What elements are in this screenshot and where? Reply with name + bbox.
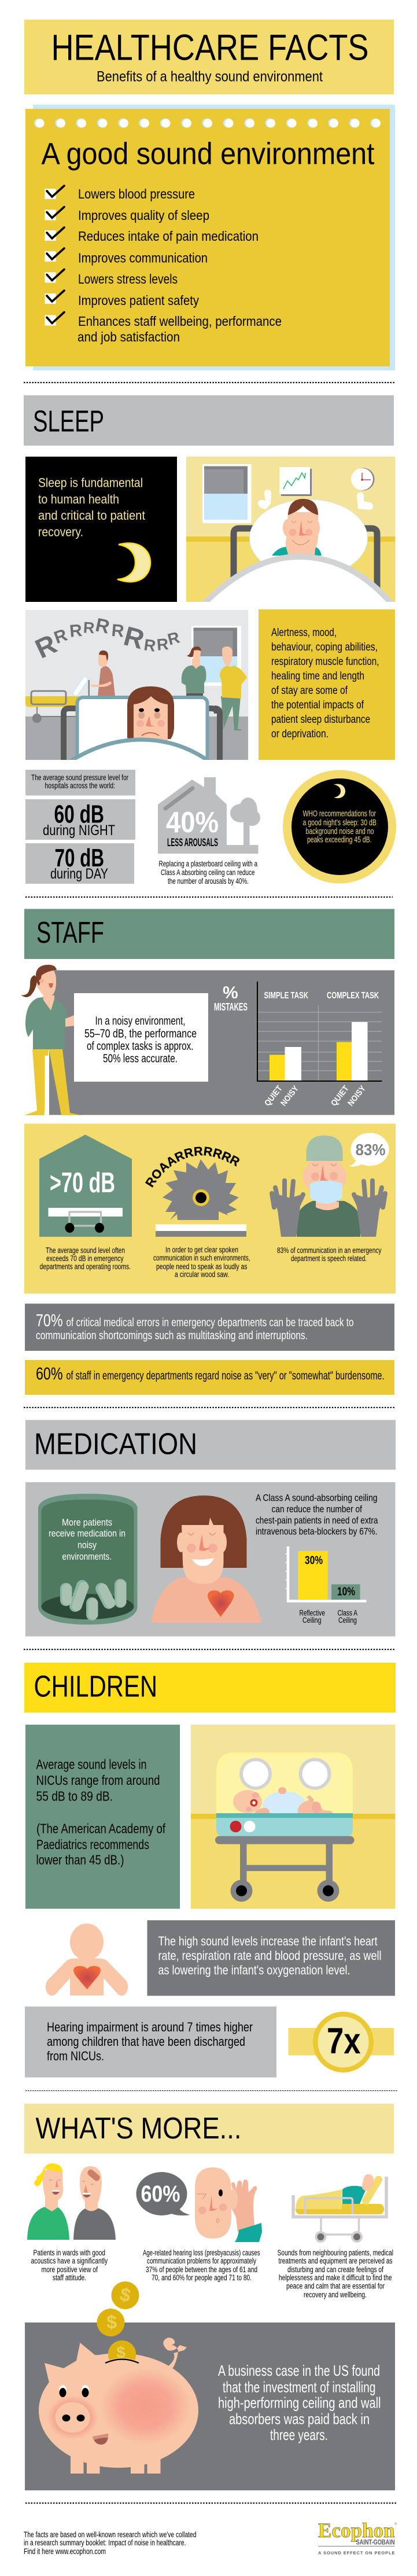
- trolley stand: [215, 1836, 354, 1902]
- snoring letters: R: [94, 613, 112, 638]
- footer note: [24, 2530, 197, 2556]
- text: class A ceiling: can reduce the number of: [272, 1504, 362, 1515]
- icon: green house with trolley: [39, 1134, 132, 1237]
- panel: sleep deprivation effects: or deprivation.: [271, 728, 329, 740]
- caption: exceeds 70 dB in emergency: [46, 1254, 124, 1263]
- illustration: snoring patient ward: [25, 610, 248, 770]
- icon: house with 40% less arousals: LESS AROUSALS: [167, 837, 218, 849]
- checklist: Improves communication: [78, 250, 208, 265]
- panel: NICU sound levels: Average sound levels in: [36, 1757, 147, 1772]
- bar chart: ceilings: [285, 1546, 367, 1625]
- badge: WHO recommendations: peaks exceeding 45 dB.: [307, 836, 371, 845]
- icon: house with 40% less arousals: [158, 777, 260, 885]
- panel: NICU sound levels: [25, 1725, 180, 1909]
- stat boxes: hospital sound levels: hospitals across the world:: [45, 781, 115, 790]
- icon: falling coins: $: [106, 2312, 117, 2332]
- checklist: Improves quality of sleep: [78, 208, 209, 223]
- panel: sleep is fundamental: [25, 457, 177, 602]
- callout: noisy environment: 55–70 dB, the performance: [84, 1028, 197, 1041]
- icon: glove right: [354, 1181, 386, 1237]
- panel: sleep deprivation effects: healing time and length: [271, 670, 364, 682]
- baby: [233, 1787, 333, 1820]
- speech bubble: 60%: [136, 2172, 190, 2215]
- callout: 70% critical medical errors: 70%: [36, 1311, 62, 1330]
- caption: department is speech related.: [291, 1254, 367, 1263]
- stat boxes: hospital sound levels: 60 dB: [54, 800, 104, 829]
- panel: NICU sound levels: lower than 45 dB.): [36, 1852, 124, 1867]
- bar chart: mistakes: QUIET: [263, 1084, 285, 1108]
- icon: house with 40% less arousals: Class A absorbing ceiling can reduce: [161, 868, 254, 877]
- badge: 7x: 7x: [327, 2021, 361, 2061]
- caption: departments and operating rooms.: [39, 1262, 131, 1271]
- panel: NICU sound levels: (The American Academy of: [36, 1821, 165, 1836]
- icon: infant with heart: [46, 1924, 128, 1996]
- logo: Ecophon: [318, 2519, 397, 2556]
- notebook holes: [34, 118, 381, 127]
- bar chart: mistakes: NOISY: [279, 1084, 301, 1108]
- icon: circular saw: ROAARRRRRRR: [145, 1146, 239, 1188]
- caption: communication in such environments,: [153, 1254, 250, 1262]
- illustration: man with hand to ear: [195, 2167, 262, 2242]
- caption: peace and calm that are essential for: [286, 2281, 385, 2291]
- logo: Ecophon: A SOUND EFFECT ON PEOPLE: [318, 2550, 394, 2556]
- panel: NICU sound levels: 55 dB to 89 dB.: [36, 1788, 113, 1803]
- caption: 83% of communication in an emergency: [277, 1246, 382, 1255]
- caption: recovery and wellbeing.: [304, 2291, 367, 2299]
- section heading: staff: STAFF: [36, 916, 104, 950]
- icon: house with 40% less arousals: Replacing a plasterboard ceiling with a: [158, 859, 257, 868]
- snoring letters: R: [165, 629, 182, 649]
- icon: small moon: [334, 784, 345, 798]
- section heading: what's more: [24, 2104, 394, 2154]
- logo: Ecophon: SAINT-GOBAIN: [356, 2538, 394, 2546]
- panel: sleep is fundamental: to human health: [38, 492, 119, 506]
- bar chart: ceilings: 30%: [305, 1555, 323, 1567]
- badge: WHO recommendations: a good night's sleep: 30 dB: [303, 818, 377, 828]
- panel: sleep is fundamental: recovery.: [38, 524, 83, 539]
- caption: communication problems for approximately: [147, 2257, 256, 2265]
- panel: sleep deprivation effects: respiratory muscle function,: [271, 656, 379, 668]
- figure: patient in bed: [61, 686, 223, 760]
- callout: noisy environment: [74, 993, 208, 1082]
- panel: sleep is fundamental: and critical to patient: [38, 508, 145, 523]
- icon: heart: [208, 1590, 234, 1617]
- bar chart: ceilings: 10%: [337, 1586, 355, 1598]
- subtitle: Benefits of a healthy sound environment: [97, 68, 323, 84]
- footer note: The facts are based on well-known research which we've collated: [24, 2530, 197, 2539]
- badge: WHO recommendations: background noise and no: [305, 827, 374, 836]
- stat boxes: hospital sound levels: The average sound pressure level for: [31, 773, 128, 782]
- snoring letters: R: [121, 620, 147, 655]
- panel: sleep deprivation effects: the potential impacts of: [271, 699, 364, 711]
- section heading: medication: [25, 1420, 396, 1470]
- bar chart: mistakes: MISTAKES: [214, 1001, 248, 1013]
- section heading: sleep: SLEEP: [33, 405, 104, 439]
- checklist: Improves patient safety: [78, 293, 199, 308]
- bar chart: mistakes: QUIET: [330, 1084, 351, 1108]
- snoring letters: R: [69, 621, 83, 641]
- caption: disturbing and can create feelings of: [287, 2265, 383, 2274]
- logo: Ecophon: Ecophon: [318, 2519, 394, 2542]
- bar chart: mistakes: COMPLEX TASK: [327, 991, 379, 1001]
- figure: visitor: [220, 646, 247, 730]
- bar chart: ceilings: Class A: [338, 1609, 357, 1617]
- section heading: what's more: WHAT'S MORE...: [36, 2112, 242, 2145]
- callout: noisy environment: In a noisy environment,: [95, 1015, 185, 1028]
- caption: more positive view of: [42, 2265, 98, 2274]
- panel: NICU sound levels: NICUs range from around: [36, 1773, 160, 1788]
- caption: Patients in wards with good: [34, 2248, 105, 2257]
- panel: sleep deprivation effects: patient sleep disturbance: [271, 714, 370, 726]
- illustration: incubator: [191, 1725, 396, 1909]
- illustration: patient in hospital bed: [293, 2174, 386, 2243]
- icon: pill jar: [38, 1494, 138, 1625]
- caption: a circular wood saw.: [175, 1270, 229, 1279]
- panel: sleep deprivation effects: of stay are some of: [271, 685, 348, 697]
- icon: piggy bank: $: [116, 2343, 126, 2361]
- icon: green house with trolley: >70 dB: [50, 1167, 115, 1199]
- caption: [39, 1246, 131, 1271]
- title banner: [24, 20, 394, 94]
- checklist: and job satisfaction: [78, 329, 180, 344]
- bar chart: mistakes: NOISY: [346, 1084, 368, 1108]
- text: class A ceiling: intravenous beta-blockers by 67%.: [256, 1527, 377, 1537]
- section heading: children: CHILDREN: [34, 1670, 157, 1704]
- callout: hearing impairment: Hearing impairment is around 7 times higher: [47, 2020, 253, 2034]
- stretcher: [25, 679, 90, 723]
- panel heading: A good sound environment: [42, 137, 375, 171]
- speech bubble: 83%: [349, 1133, 389, 1167]
- figure: woman with heart: [152, 1495, 261, 1623]
- panel: noisy environment performance: [21, 965, 394, 1115]
- caption: [153, 1245, 250, 1279]
- checklist: Reduces intake of pain medication: [78, 229, 259, 244]
- section heading: medication: MEDICATION: [34, 1427, 197, 1461]
- callout: hearing impairment: among children that have been discharged: [47, 2034, 245, 2049]
- badge: 7x: [288, 2012, 394, 2072]
- illustration: sleeping patient: [186, 457, 396, 608]
- icon: falling coins: $: [118, 2284, 132, 2306]
- footer note: Find it here www.ecophon.com: [24, 2547, 106, 2556]
- caption: Age-related hearing loss (presbyacusis) causes: [143, 2248, 260, 2257]
- text: class A ceiling: chest-pain patients in need of extra: [256, 1515, 378, 1526]
- jar label: [49, 1517, 126, 1562]
- text: class A ceiling: [256, 1493, 378, 1537]
- snoring letters: R: [83, 619, 95, 637]
- panel: sleep deprivation effects: Alertness, mood,: [271, 627, 337, 639]
- speech bubble: 60%: 60%: [141, 2181, 180, 2207]
- snoring letters: R: [51, 626, 70, 648]
- icon: glove left: [271, 1181, 303, 1237]
- icon: tree: [230, 798, 260, 846]
- footer note: in a research summary booklet: Impact of noise in healthcare.: [24, 2538, 186, 2547]
- section heading: children: [24, 1663, 396, 1713]
- title: HEALTHCARE FACTS: [51, 28, 369, 68]
- caption: acoustics have a significantly: [31, 2257, 108, 2265]
- bar chart: ceilings: Reflective: [300, 1609, 325, 1617]
- icon: house with 40% less arousals: 40%: [166, 806, 219, 839]
- checklist: Enhances staff wellbeing, performance: [78, 314, 282, 329]
- panel: sleep deprivation effects: behaviour, coping abilities,: [271, 641, 378, 653]
- panel: emergency department facts: [24, 1124, 396, 1293]
- bar chart: mistakes: SIMPLE TASK: [264, 991, 308, 1001]
- panel: NICU sound levels: Paediatrics recommends: [36, 1837, 149, 1852]
- figure: porter: [91, 651, 115, 696]
- checklist: Lowers blood pressure: [78, 186, 195, 201]
- bar chart: ceilings: Ceiling: [338, 1616, 357, 1625]
- section heading: staff: [24, 909, 394, 959]
- caption: [277, 1246, 382, 1263]
- stat boxes: hospital sound levels: during DAY: [50, 866, 108, 882]
- text: class A ceiling: A Class A sound-absorbing ceiling: [256, 1493, 377, 1504]
- panel: a good sound environment: [25, 105, 395, 370]
- panel: business case: [25, 2281, 395, 2490]
- caption: In order to get clear spoken: [165, 1245, 238, 1254]
- snoring letters: R: [110, 621, 125, 641]
- badge: WHO recommendations: WHO recommendations for: [303, 809, 376, 818]
- pills: [66, 1585, 121, 1615]
- caption: 70, and 60% for people aged 71 to 80.: [152, 2273, 252, 2282]
- icon: circular saw: [145, 1146, 246, 1237]
- callout: noisy environment: of complex tasks is approx.: [87, 1040, 193, 1053]
- icon: piggy bank: [39, 2338, 198, 2474]
- callout: noisy environment: 50% less accurate.: [103, 1052, 178, 1065]
- jar label: environments.: [62, 1551, 112, 1562]
- callout: 60% of staff: [25, 1360, 394, 1395]
- caption: people need to speak as loudly as: [156, 1262, 248, 1271]
- stat boxes: hospital sound levels: 70 dB: [54, 844, 104, 872]
- checklist: Lowers stress levels: [78, 271, 178, 286]
- panel: medication: [25, 1482, 396, 1637]
- caption: [143, 2248, 260, 2282]
- logo: Ecophon: ®: [394, 2522, 397, 2526]
- panel text: absorbers was paid back in: [229, 2410, 370, 2427]
- panel: sleep is fundamental: Sleep is fundamental: [38, 476, 143, 490]
- bar chart: mistakes: [214, 982, 382, 1108]
- caption: The average sound level often: [46, 1246, 125, 1255]
- snoring letters: R: [31, 628, 61, 664]
- badge: WHO recommendations: [283, 770, 396, 883]
- jar label: More patients: [62, 1517, 112, 1528]
- speech bubble: 83%: 83%: [355, 1141, 386, 1159]
- icon: falling coins: [97, 2281, 139, 2367]
- callout: hearing impairment: from NICUs.: [47, 2049, 104, 2063]
- snoring letters: R: [143, 635, 157, 655]
- snoring letters: R: [156, 635, 169, 654]
- jar label: receive medication in: [49, 1528, 126, 1539]
- panel text: three years.: [270, 2426, 328, 2443]
- callout: 70% critical medical errors: communication shortcomings such as multitasking and interruptions.: [36, 1329, 308, 1342]
- checklist: [45, 186, 282, 344]
- caption: [278, 2248, 393, 2299]
- illustration: patient and staff faces: [27, 2163, 116, 2240]
- stat boxes: hospital sound levels: during NIGHT: [43, 822, 115, 839]
- icon: surgeon: [271, 1133, 389, 1237]
- icon: house with 40% less arousals: the number of arousals by 40%.: [168, 877, 249, 885]
- caption: [31, 2248, 108, 2282]
- caption: staff attitude.: [53, 2273, 86, 2282]
- bar chart: mistakes: %: [223, 983, 238, 1002]
- caption: 37% of people between the ages of 61 and: [146, 2265, 257, 2274]
- callout: hearing impairment: [25, 2007, 276, 2078]
- panel text: [218, 2362, 381, 2443]
- section heading: sleep: [24, 395, 394, 446]
- callout: 70% critical medical errors: [25, 1303, 394, 1351]
- jar label: noisy: [78, 1539, 97, 1550]
- stat boxes: hospital sound levels: [25, 770, 135, 884]
- figure: staff woman: [21, 965, 103, 1115]
- icon: crescent moon: [117, 543, 150, 582]
- callout: infant heart rate: [147, 1920, 395, 1996]
- callout: 60% of staff: 60%: [36, 1365, 62, 1383]
- bar chart: ceilings: Ceiling: [302, 1616, 322, 1625]
- panel: sleep deprivation effects: [259, 609, 395, 760]
- callout: infant heart rate: as lowering the infant's oxygenation level.: [158, 1963, 350, 1977]
- figure: nurse: [182, 646, 206, 697]
